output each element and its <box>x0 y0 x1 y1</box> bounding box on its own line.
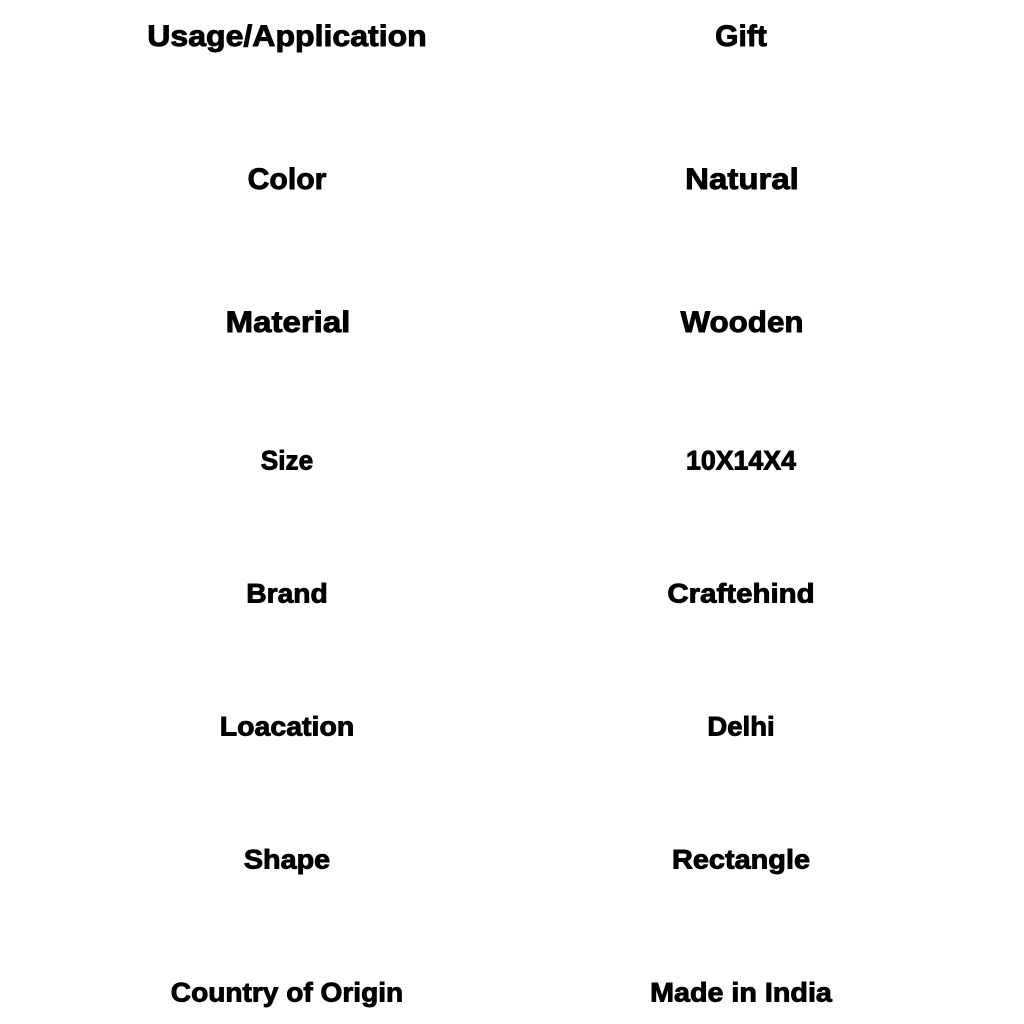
label: country of origin: Country of Origin <box>171 978 403 1008</box>
value: natural: Natural <box>685 163 798 196</box>
label: location: Loacation <box>220 712 354 742</box>
value: craftehind: Craftehind <box>667 578 815 608</box>
value: rectangle: Rectangle <box>672 844 810 874</box>
label: usage/application: Usage/Application <box>147 20 427 53</box>
label: shape: Shape <box>244 844 330 874</box>
label: material: Material <box>225 306 350 339</box>
value: gift: Gift <box>715 20 767 53</box>
value: size dimensions: 10X14X4 <box>686 446 796 476</box>
label: brand: Brand <box>246 578 328 608</box>
value: made in india: Made in India <box>650 978 832 1008</box>
label: color: Color <box>248 163 326 196</box>
value: delhi: Delhi <box>707 712 775 742</box>
value: wooden: Wooden <box>680 306 803 339</box>
label: size: Size <box>261 446 313 476</box>
